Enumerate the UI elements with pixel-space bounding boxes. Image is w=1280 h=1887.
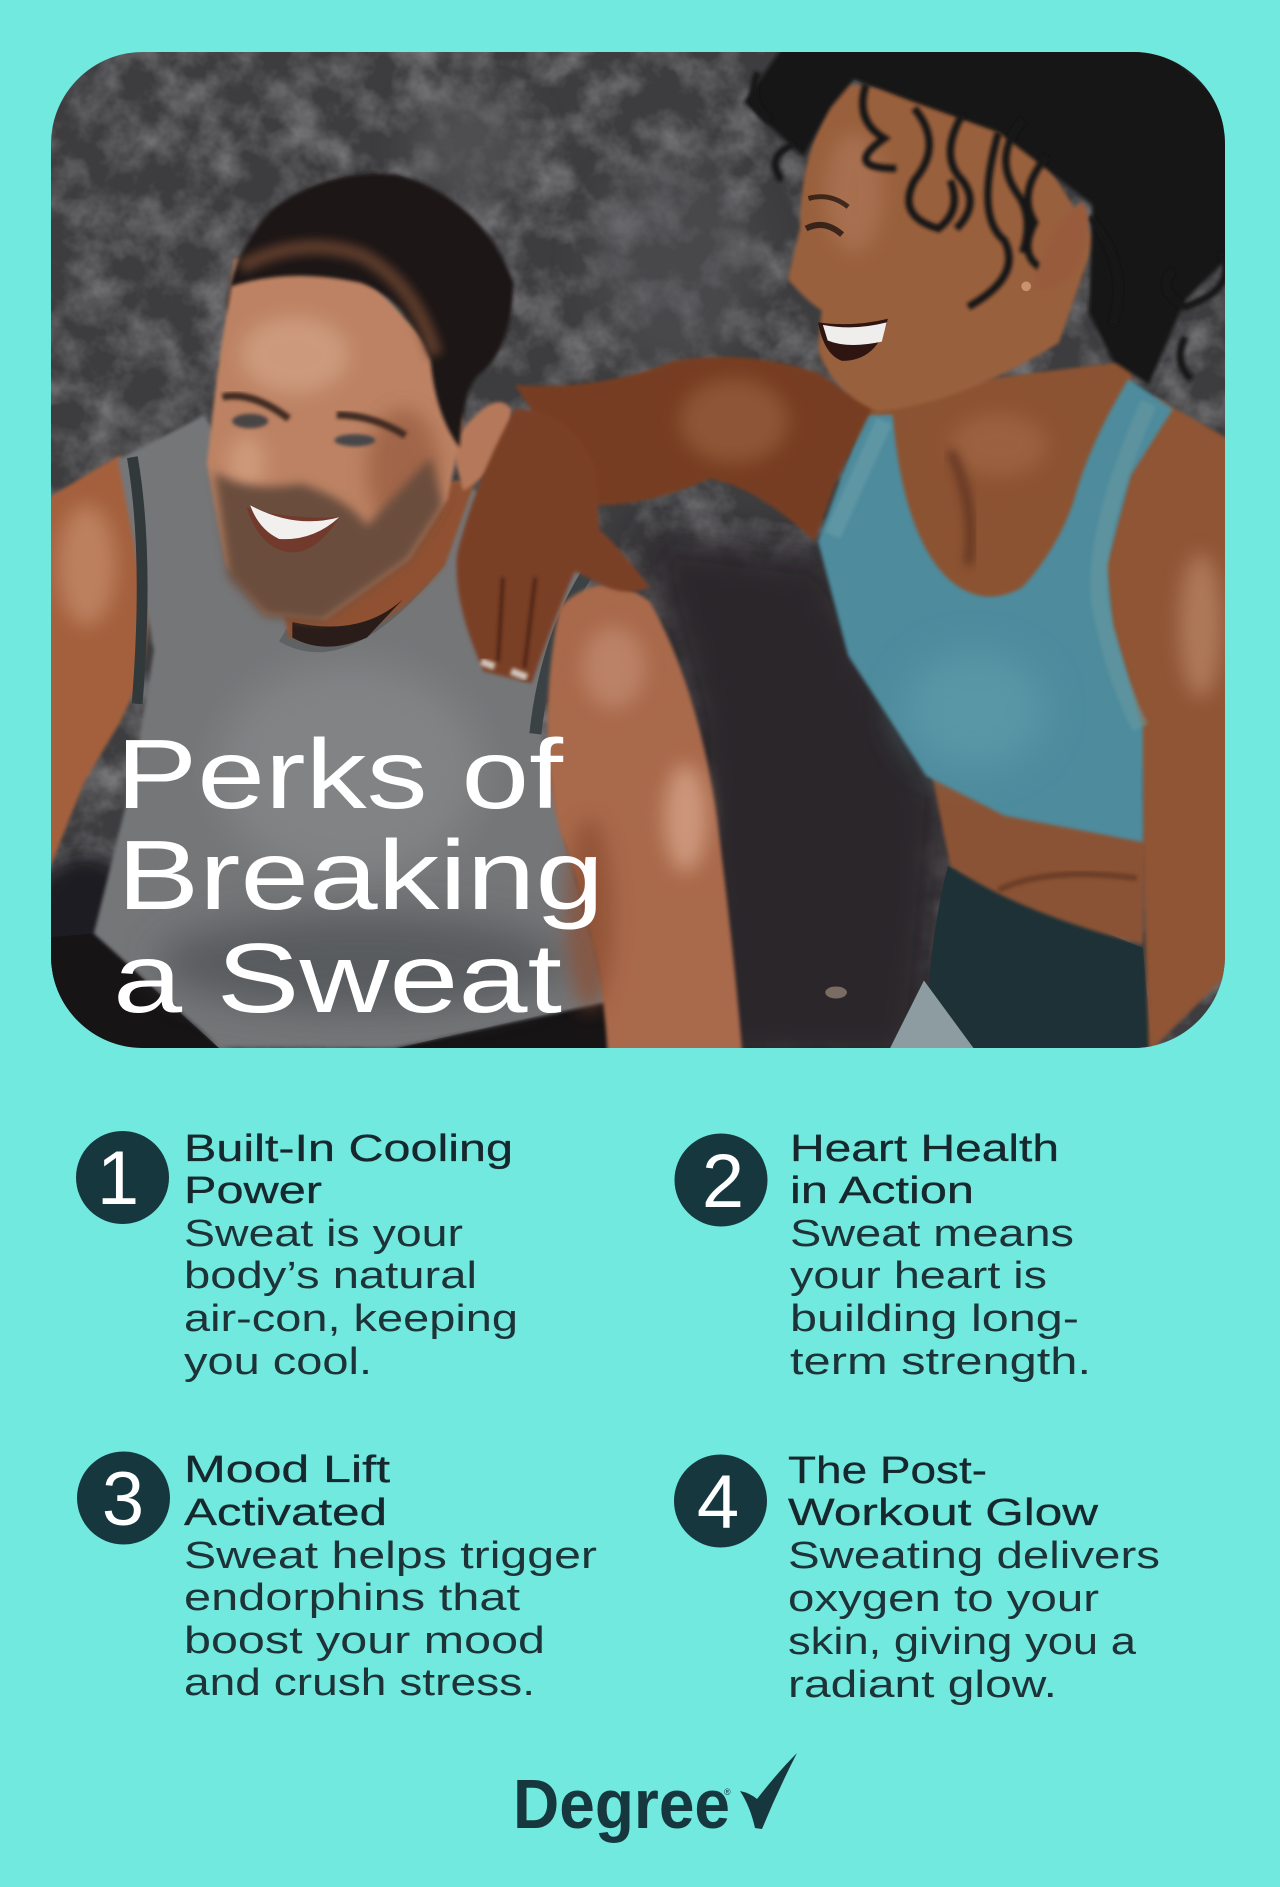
man: ear <box>451 402 511 491</box>
text block 3: boost your mood <box>184 1620 545 1662</box>
text block 4: The Post- <box>788 1450 987 1492</box>
logo: Degree: ® <box>724 1787 731 1797</box>
number badge 4: 4 <box>697 1460 739 1545</box>
text block 1: air-con, keeping <box>184 1298 518 1340</box>
number badge 4 <box>674 1454 767 1548</box>
man: face <box>207 259 463 620</box>
woman: hand <box>457 409 650 683</box>
item 3: mood lift activated <box>77 1449 597 1704</box>
man: tank top <box>94 415 608 1048</box>
woman: ear <box>1036 201 1092 276</box>
item 2: heart health in action <box>674 1128 1091 1383</box>
number badge 1: 1 <box>97 1136 139 1221</box>
text block 3 <box>184 1449 597 1704</box>
text block 3: Sweat helps trigger <box>184 1535 597 1577</box>
text block 4: Sweating delivers <box>788 1535 1160 1577</box>
item 1: built-in cooling power <box>76 1128 518 1383</box>
number badge 2 <box>674 1134 768 1226</box>
text block 1: Power <box>184 1170 322 1212</box>
text block 2: your heart is <box>790 1255 1047 1297</box>
number badge 1 <box>76 1131 169 1224</box>
woman: teal top <box>818 379 1173 842</box>
text block 2: Sweat means <box>790 1213 1074 1255</box>
number badge 3: 3 <box>102 1457 144 1542</box>
woman: hair <box>743 46 1233 385</box>
wall <box>24 48 1233 1071</box>
wall speck <box>825 986 847 998</box>
text block 2: in Action <box>790 1170 974 1212</box>
text block 4: Workout Glow <box>788 1492 1099 1534</box>
text block 1 <box>184 1128 518 1383</box>
text block 1: Built-In Cooling <box>184 1128 513 1170</box>
title: Breaking <box>117 820 604 930</box>
title: Perks of <box>116 719 564 829</box>
man: dark bottom <box>51 934 608 1048</box>
text block 1: body’s natural <box>184 1255 477 1297</box>
woman: belly <box>932 776 1145 944</box>
woman: leggings <box>890 980 974 1048</box>
text block 2 <box>790 1128 1091 1383</box>
woman: arm over shoulder <box>515 357 872 541</box>
text block 3: Mood Lift <box>184 1449 391 1491</box>
icon: check mark <box>740 1753 797 1829</box>
text block 2: term strength. <box>790 1341 1091 1383</box>
logo: Degree: Degree <box>513 1765 730 1843</box>
text block 4 <box>788 1450 1160 1706</box>
man: right arm <box>547 585 742 1053</box>
man: hair <box>226 174 514 448</box>
text block 3: endorphins that <box>184 1577 521 1619</box>
number badge 3 <box>77 1452 170 1544</box>
text block 2: building long- <box>790 1298 1079 1340</box>
man: teeth <box>250 505 339 539</box>
text block 2: Heart Health <box>790 1128 1059 1170</box>
text block 1: you cool. <box>184 1341 372 1383</box>
woman: face <box>788 84 1095 411</box>
text block 4: skin, giving you a <box>788 1621 1137 1663</box>
item 4: the post-workout glow <box>674 1450 1160 1706</box>
text block 3: Activated <box>184 1492 387 1534</box>
man: neck <box>283 481 475 644</box>
text block 1: Sweat is your <box>184 1213 463 1255</box>
woman: right arm <box>1106 396 1225 1047</box>
man: beard <box>214 457 443 622</box>
title: a Sweat <box>113 923 562 1033</box>
man: eyes and brows <box>223 396 405 446</box>
man: left arm <box>51 454 150 871</box>
photo: two smiling athletes <box>24 46 1239 1071</box>
number badge 2: 2 <box>702 1139 744 1224</box>
text block 4: oxygen to your <box>788 1578 1099 1620</box>
woman: smile <box>823 322 887 345</box>
woman: chest and neck <box>853 362 1134 599</box>
woman: shorts <box>926 866 1152 1053</box>
text block 4: radiant glow. <box>788 1664 1057 1706</box>
title <box>113 719 604 1033</box>
text block 3: and crush stress. <box>184 1662 535 1704</box>
